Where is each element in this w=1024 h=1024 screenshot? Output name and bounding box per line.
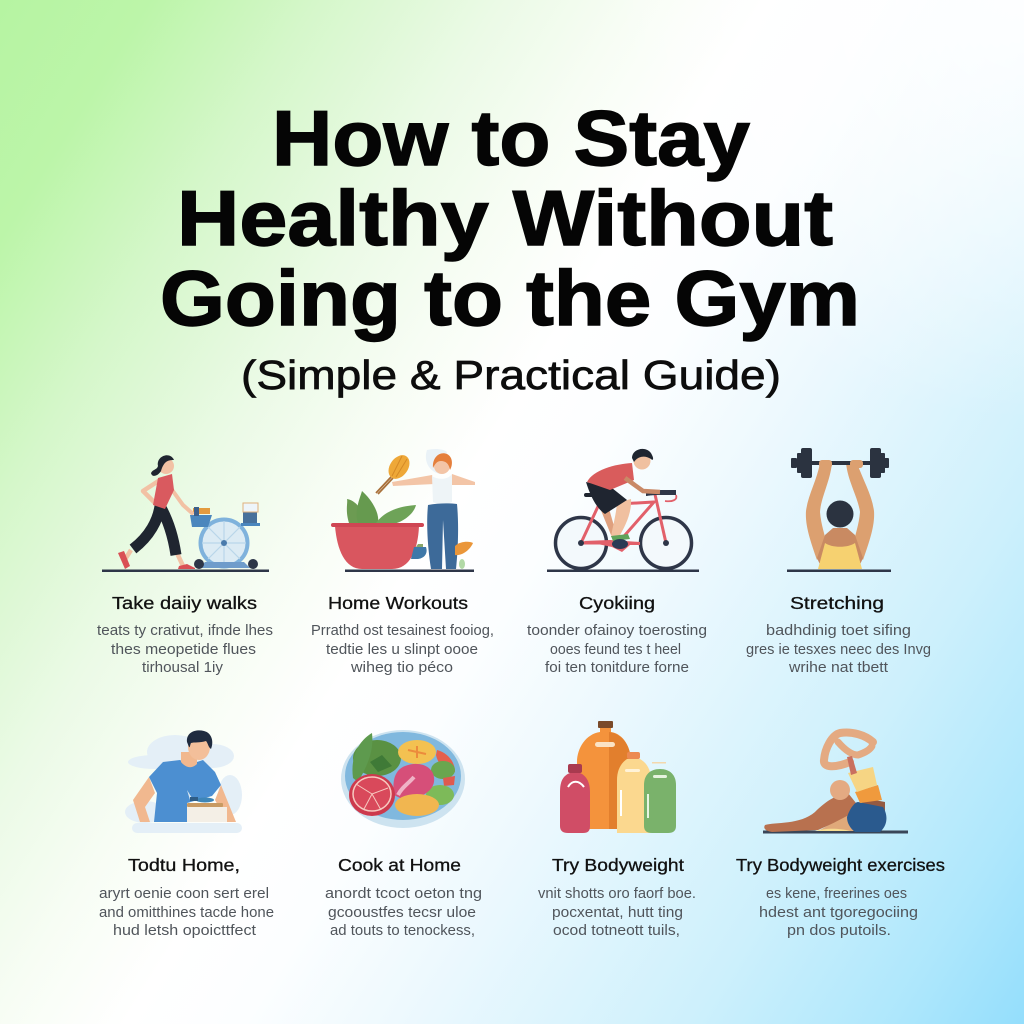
heading: Todtu Home,	[128, 855, 240, 875]
panel: cycling	[527, 449, 707, 676]
description: thes meopetide flues	[111, 642, 256, 658]
heading: Cyokiing	[579, 593, 655, 613]
heading: Take daiiy walks	[112, 593, 257, 613]
panel: bodyweight exercises	[736, 732, 945, 939]
icon: person lifting barbell	[787, 448, 891, 572]
icon: person in seated yoga stretch	[763, 732, 908, 834]
icon: woman walking with wheel machine	[102, 455, 269, 572]
description: badhdinig toet sifing	[766, 623, 911, 639]
icon: man at table with clouds	[125, 730, 242, 833]
description: pocxentat, hutt ting	[552, 905, 683, 921]
description: gcooustfes tecsr uloe	[328, 905, 476, 921]
panel: cook at home	[325, 730, 482, 939]
heading: Home Workouts	[328, 593, 468, 613]
title	[160, 94, 860, 342]
description: Prrathd ost tesainest fooiog,	[311, 623, 494, 639]
description: tedtie les u slinpt oooe	[326, 642, 478, 658]
description: anordt tcoct oeton tng	[325, 886, 482, 902]
description: vnit shotts oro faorf boe.	[538, 886, 696, 902]
title: How to Stay	[272, 94, 750, 182]
description: es kene, freerines oes	[766, 886, 907, 902]
heading: Try Bodyweight	[552, 855, 684, 875]
description	[97, 623, 273, 676]
description	[325, 886, 482, 939]
description: hud letsh opoicttfect	[113, 923, 256, 939]
description	[527, 623, 707, 676]
panel: stretching	[746, 448, 931, 676]
description: ooes feund tes t heel	[550, 642, 681, 658]
panel: home	[99, 730, 274, 939]
description	[759, 886, 918, 939]
title: Healthy Without	[177, 174, 833, 262]
description: and omitthines tacde hone	[99, 905, 274, 921]
description: gres ie tesxes neec des Invg	[746, 642, 931, 658]
icon: salad bowl, whisk and woman stretching	[331, 449, 475, 572]
description: tirhousal 1iy	[142, 660, 224, 676]
description: ad touts to tenockess,	[330, 923, 475, 939]
description	[311, 623, 494, 676]
icon: cyclist on red bicycle	[547, 449, 699, 572]
panel: bottles	[538, 721, 696, 939]
description: wrihe nat tbett	[788, 660, 888, 676]
description: wiheg tio péco	[350, 660, 453, 676]
icon: bowl of vegetables	[341, 730, 465, 828]
panel: home workouts	[311, 449, 494, 676]
subtitle: (Simple & Practical Guide)	[241, 352, 781, 398]
description: foi ten tonitdure forne	[545, 660, 689, 676]
heading: Stretching	[790, 593, 884, 613]
heading: Try Bodyweight exercises	[736, 855, 945, 875]
description: hdest ant tgoregociing	[759, 905, 918, 921]
description	[746, 623, 931, 676]
description: toonder ofainoy toerosting	[527, 623, 707, 639]
description: aryrt oenie coon sert erel	[99, 886, 269, 902]
heading: Cook at Home	[338, 855, 461, 875]
description	[538, 886, 696, 939]
description: ocod totneott tuils,	[553, 923, 680, 939]
title: Going to the Gym	[160, 254, 860, 342]
panel: take daily walks	[97, 455, 273, 676]
icon: four colourful bottles	[560, 721, 676, 833]
description: pn dos putoils.	[787, 923, 891, 939]
description	[99, 886, 274, 939]
description: teats ty crativut, ifnde lhes	[97, 623, 273, 639]
